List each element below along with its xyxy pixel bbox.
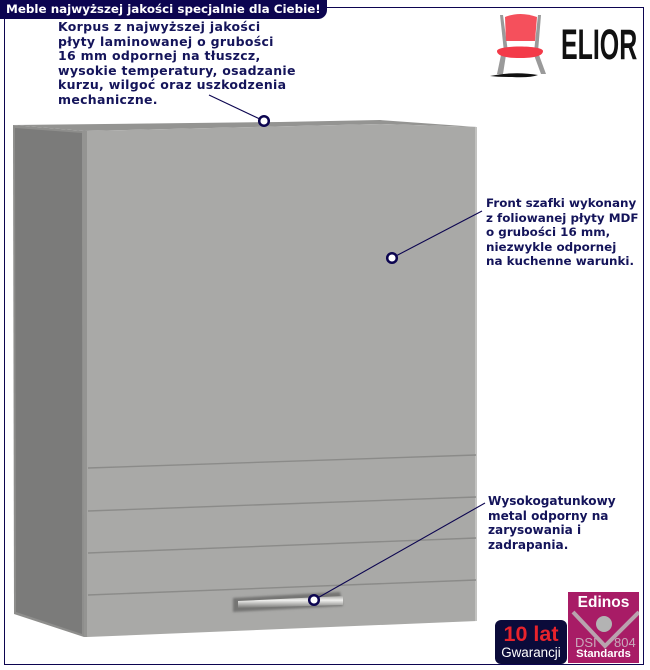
top face <box>13 120 477 131</box>
text: front description: o grubości 16 mm, <box>486 225 610 239</box>
text: carcass description: wysokie temperatury, osadzanie <box>58 63 296 78</box>
text: metal description: zarysowania i <box>488 523 581 537</box>
pointer: front <box>387 211 482 263</box>
warranty years: 10 lat <box>504 622 558 646</box>
text: metal description: metal odporny na <box>488 509 608 523</box>
header banner: Meble najwyższej jakości specjalnie dla Ciebie! <box>6 2 321 16</box>
text: carcass description <box>58 19 296 107</box>
badge title: Edinos <box>578 594 629 611</box>
text: metal description: Wysokogatunkowy <box>488 494 616 508</box>
front grooves <box>88 455 476 595</box>
pointer: carcass <box>209 95 269 126</box>
text: front description: na kuchenne warunki. <box>486 254 634 268</box>
badge code left: DSI <box>575 635 597 650</box>
text: front description: niezwykle odpornej <box>486 240 616 254</box>
text: carcass description: 16 mm odpornej na tłuszcz, <box>58 48 261 63</box>
badge subtitle: Standards <box>576 648 631 660</box>
badge emblem <box>572 610 639 649</box>
icon: red chair <box>490 14 546 77</box>
text: carcass description: mechaniczne. <box>58 92 158 107</box>
text: carcass description: kurzu, wilgoć oraz uszkodzenia <box>58 77 286 92</box>
text: metal description <box>488 494 616 552</box>
side panel <box>13 125 84 637</box>
badge code right: 804 <box>614 635 636 650</box>
text: front description: Front szafki wykonany <box>486 196 636 210</box>
badge: 10 year warranty <box>495 620 567 664</box>
logo: Elior: ELIOR <box>561 21 637 69</box>
badge: Edinos standards <box>568 592 639 663</box>
text: front description <box>486 196 639 268</box>
text: carcass description: Korpus z najwyższej jakości <box>58 19 260 34</box>
warranty label: Gwarancji <box>501 645 561 660</box>
text: carcass description: płyty laminowanej o grubości <box>58 34 274 49</box>
pointer: handle <box>309 503 485 605</box>
front edge <box>82 131 88 637</box>
front panel <box>87 124 477 637</box>
text: front description: z foliowanej płyty MDF <box>486 211 639 225</box>
handle <box>233 592 343 612</box>
text: metal description: zadrapania. <box>488 538 568 552</box>
